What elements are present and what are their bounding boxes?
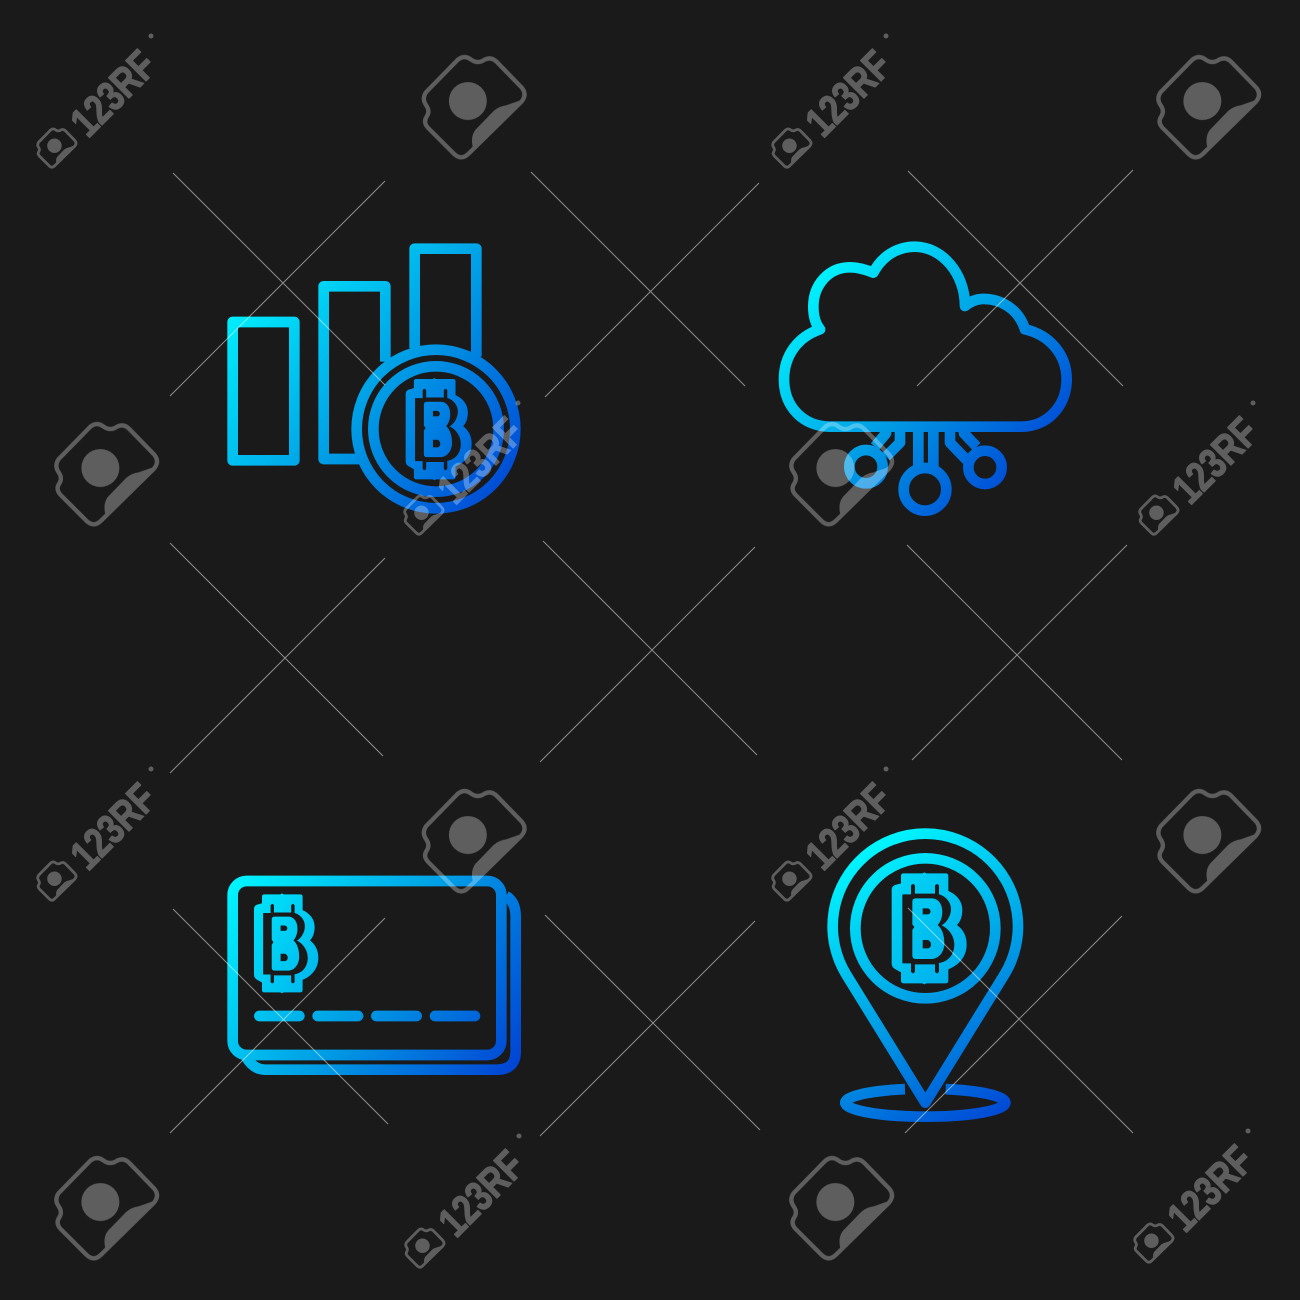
- bitcoin symbol: [254, 893, 318, 993]
- bar 1: [233, 322, 294, 460]
- logo 4: 123RF: [1163, 408, 1267, 512]
- bar 2: [324, 286, 385, 459]
- sticker 5: [424, 791, 524, 891]
- logo 1: [38, 34, 165, 167]
- logo 6: 123RF: [796, 774, 900, 878]
- logo 7: [406, 1134, 533, 1267]
- ground ellipse: [845, 1089, 1005, 1117]
- logo 3: [405, 400, 532, 534]
- card number dashes: [259, 1000, 475, 1032]
- sticker 2: [1158, 57, 1259, 157]
- sticker 3: [56, 424, 157, 524]
- front card: [233, 881, 501, 1055]
- logo 7: 123RF: [429, 1141, 533, 1245]
- back card: [246, 896, 516, 1070]
- logo 4: [1140, 400, 1267, 534]
- circuit connectors: [875, 428, 977, 470]
- pin inner ring: [855, 858, 995, 998]
- icon: cloud with circuit nodes: [784, 247, 1067, 511]
- bitcoin symbol: [892, 872, 967, 984]
- logo 5: [38, 766, 165, 900]
- crosshair guide lines: [170, 170, 1133, 1136]
- node right: [968, 451, 1002, 484]
- icon: bitcoin location pin: [833, 834, 1018, 1117]
- sticker 4: [791, 424, 892, 524]
- coin outer ring: [357, 350, 515, 508]
- bitcoin symbol: [406, 378, 472, 480]
- sticker 6: [1158, 791, 1259, 891]
- coin inner ring: [373, 366, 499, 492]
- logo 8: 123RF: [1158, 1136, 1262, 1240]
- logo 2: [773, 34, 900, 167]
- icon: bitcoin credit cards: [233, 881, 516, 1070]
- logo 5: 123RF: [61, 774, 165, 878]
- logo 6: [773, 766, 900, 900]
- node left: [849, 450, 883, 483]
- pin outline: [833, 834, 1018, 1103]
- logo 8: [1135, 1128, 1262, 1262]
- bar 3: [415, 249, 476, 357]
- node middle: [904, 468, 946, 511]
- sticker 7: [56, 1158, 157, 1258]
- sticker 8: [791, 1158, 892, 1258]
- icon: bar chart with bitcoin coin: [233, 249, 515, 508]
- cloud outline: [784, 247, 1067, 427]
- logo 3: 123RF: [428, 408, 532, 512]
- sticker 1: [424, 57, 524, 157]
- logo 2: 123RF: [796, 41, 900, 145]
- logo 1: 123RF: [61, 41, 165, 145]
